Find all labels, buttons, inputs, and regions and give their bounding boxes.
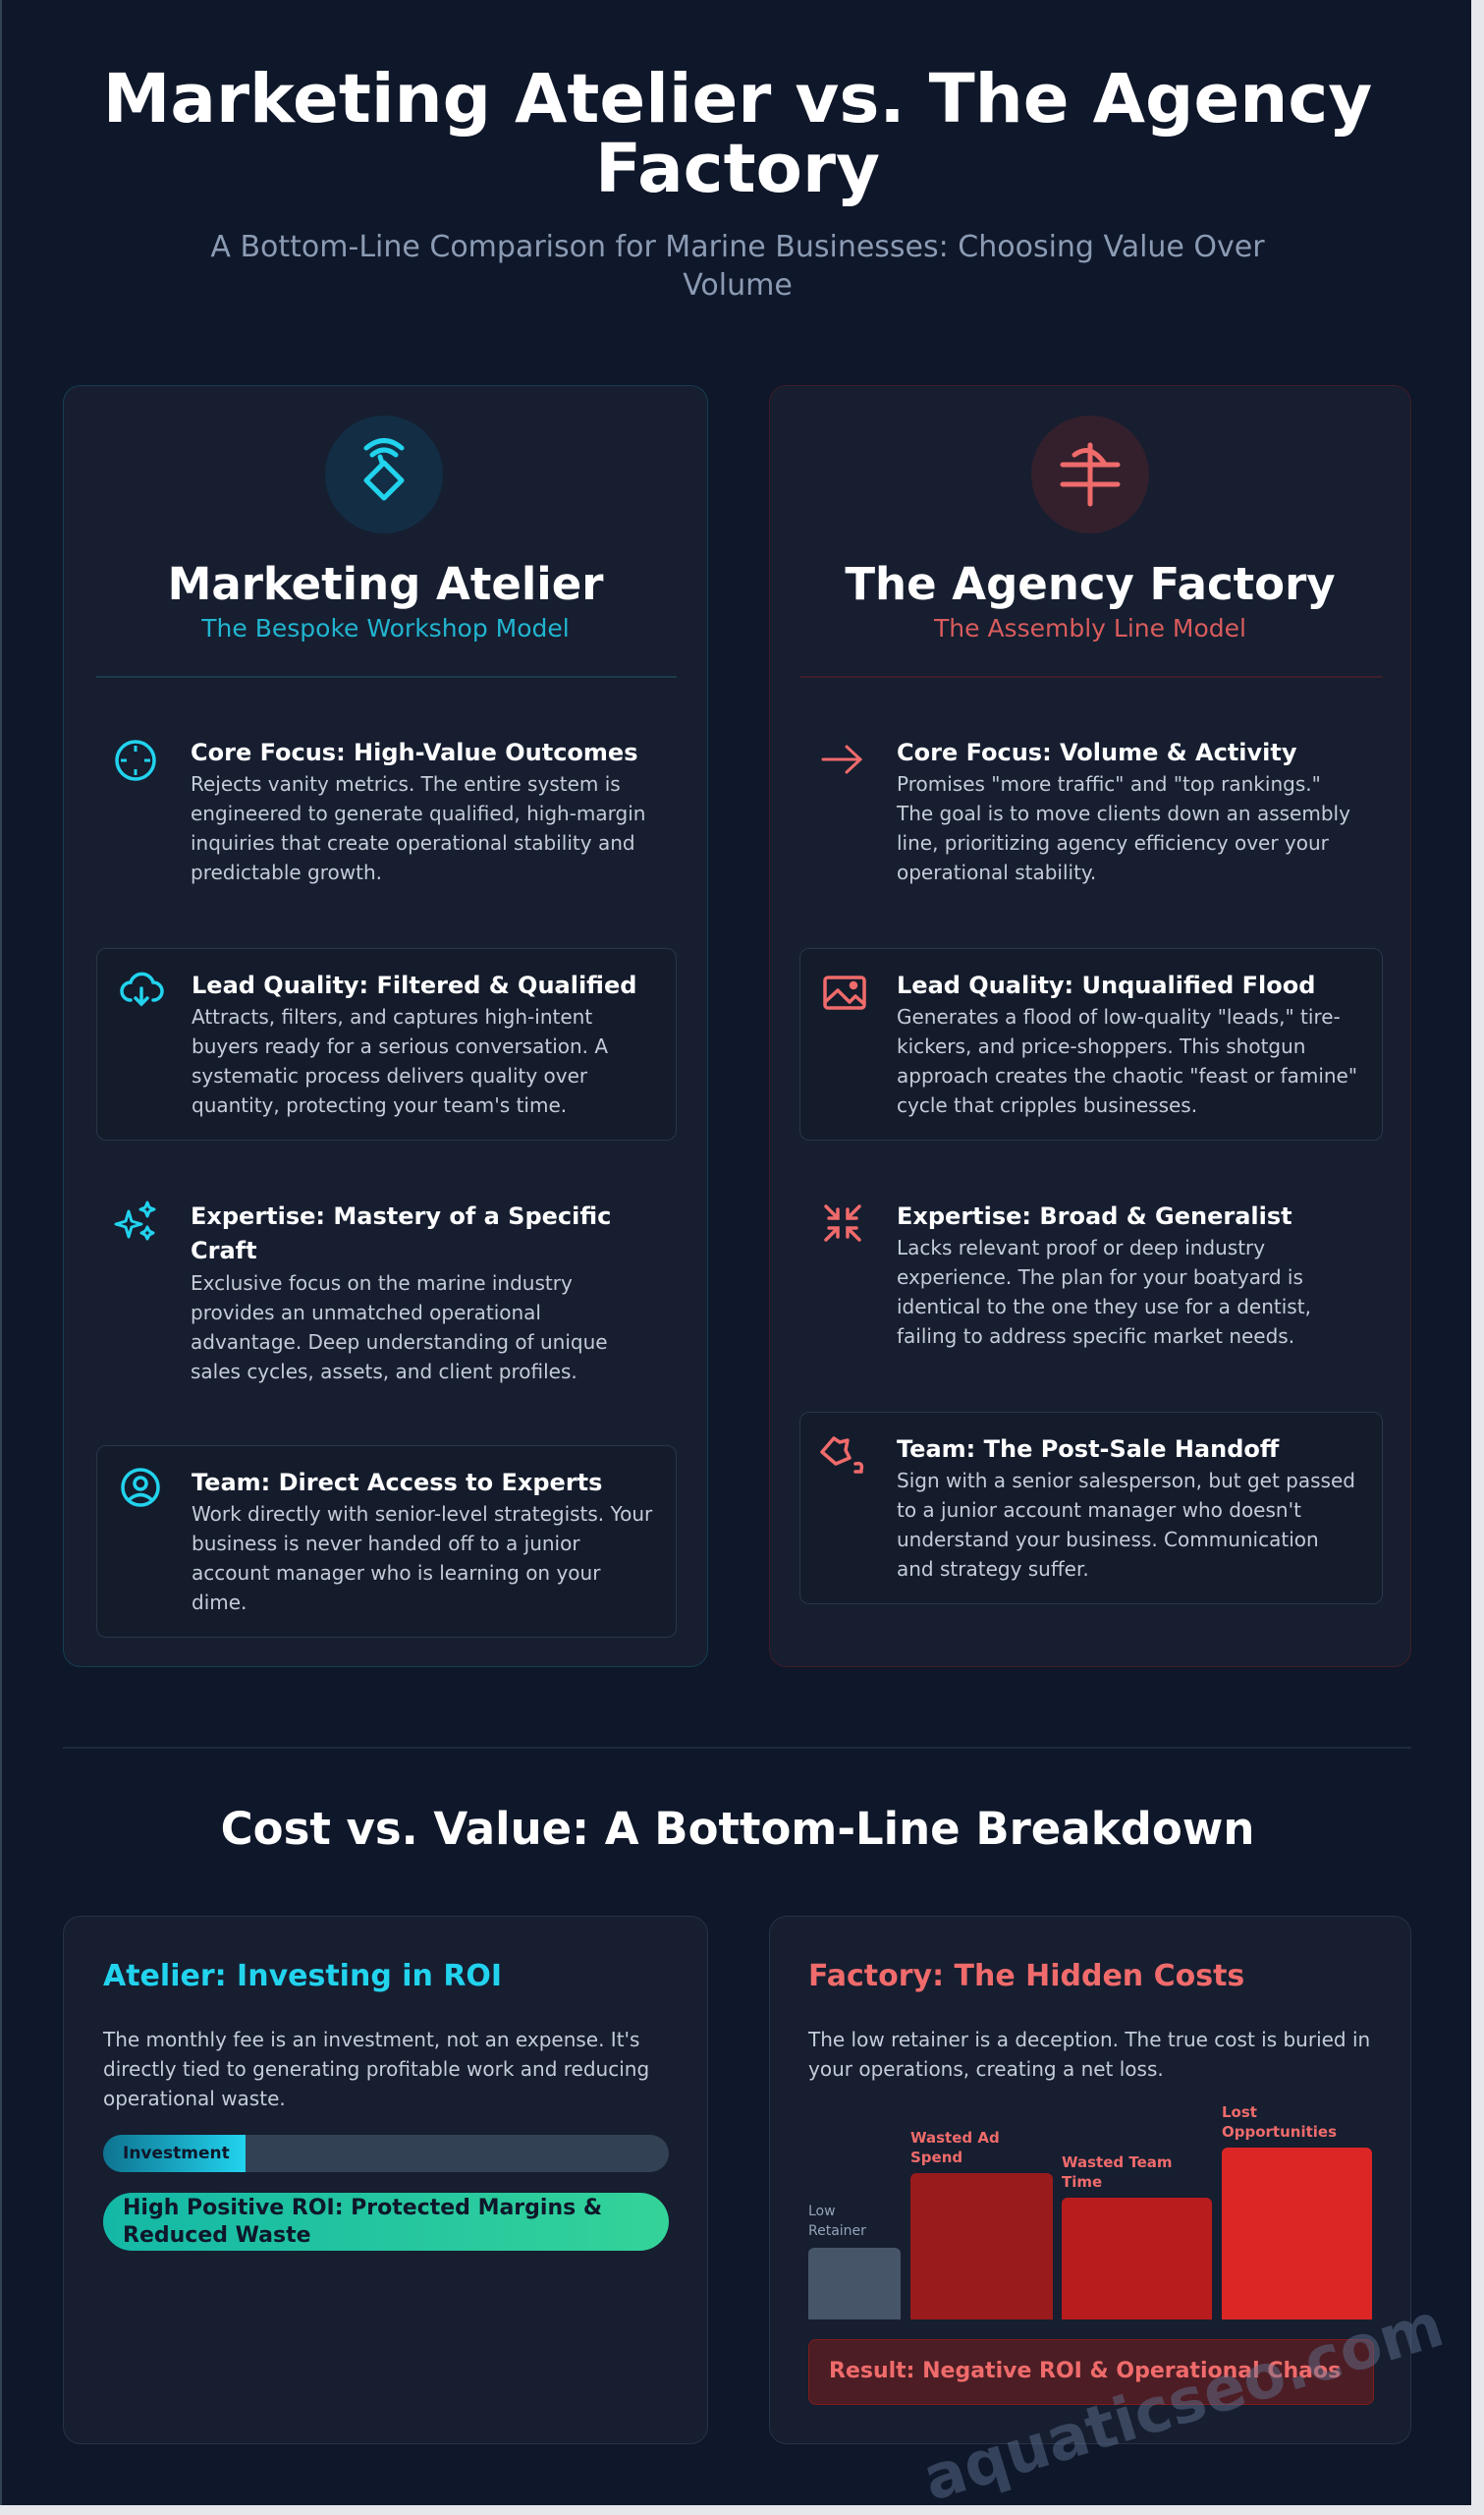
bar: lost opportunities: Opportunities: [1222, 2123, 1337, 2141]
subtitle: Volume: [683, 268, 793, 303]
panel: agency factory: operational stability.: [897, 861, 1096, 884]
item: expertise: [114, 1201, 611, 1383]
icon: arrow right: [821, 745, 862, 774]
item: team: Team: Direct Access to Experts: [192, 1469, 602, 1496]
result callout: Result: Negative ROI & Operational Chaos: [829, 2359, 1341, 2383]
bar: wasted ad spend: Spend: [910, 2149, 962, 2166]
paragraph: The monthly fee is an investment, not an expense. It's: [103, 2028, 639, 2051]
panel: agency factory: Promises "more traffic" and "top rankings.": [897, 772, 1321, 796]
bar: wasted ad spend: Wasted Ad: [910, 2129, 1000, 2147]
bar: wasted team time: Time: [1062, 2173, 1102, 2191]
item: team: Work directly with senior-level strategists. Your: [192, 1502, 652, 1526]
item: lead quality: Generates a flood of low-quality "leads," tire-: [897, 1005, 1341, 1029]
subheading: The Assembly Line Model: [934, 614, 1246, 643]
item: team: business is never handed off to a junior: [192, 1532, 580, 1555]
item: team: Sign with a senior salesperson, but get passed: [897, 1469, 1355, 1492]
paragraph: directly tied to generating profitable work and reducing: [103, 2057, 649, 2081]
panel: agency factory: experience. The plan for your boatyard is: [897, 1265, 1303, 1289]
title: [103, 60, 1372, 208]
bar: low retainer: Retainer: [808, 2223, 866, 2239]
heading: investing in ROI: Atelier: Investing in ROI: [103, 1959, 502, 1993]
icon: cloud download: [120, 973, 164, 1006]
title: Factory: [595, 130, 880, 208]
section heading: Cost vs. Value: A Bottom-Line Breakdown: [221, 1803, 1254, 1855]
panel: agency factory: Lacks relevant proof or deep industry: [897, 1236, 1265, 1259]
bar: lost opportunities: Lost: [1222, 2103, 1257, 2121]
item: core focus: [115, 739, 645, 884]
bar: wasted ad spend: [910, 2129, 1053, 2319]
item: lead quality: cycle that cripples businesses.: [897, 1093, 1197, 1117]
panel: agency factory: Expertise: Broad & Generalist: [897, 1202, 1292, 1230]
panel: marketing atelier: [63, 385, 708, 1667]
item: team: to a junior account manager who doesn't: [897, 1498, 1301, 1522]
item: lead quality: approach creates the chaotic "feast or famine": [897, 1064, 1357, 1088]
paragraph: operational waste.: [103, 2087, 286, 2110]
panel: marketing atelier: Exclusive focus on the marine industry: [191, 1271, 573, 1295]
paragraph: The low retainer is a deception. The true cost is buried in: [808, 2028, 1370, 2051]
subtitle: [210, 230, 1265, 303]
paragraph: [102, 2028, 649, 2110]
icon: sparkles: [114, 1201, 155, 1241]
panel: marketing atelier: Expertise: Mastery of a Specific: [191, 1202, 611, 1230]
icon: atelier badge: [325, 416, 443, 533]
panel: marketing atelier: Craft: [191, 1237, 257, 1264]
icon: handoff tag: [820, 1436, 864, 1474]
item: lead quality: kickers, and price-shoppers. This shotgun: [897, 1034, 1305, 1058]
panel: agency factory: failing to address specific market needs.: [897, 1324, 1294, 1348]
panel: atelier ROI: [63, 1916, 708, 2444]
item: expertise: [824, 1202, 1311, 1348]
panel: agency factory: [769, 385, 1411, 1667]
panel: marketing atelier: Core Focus: High-Value Outcomes: [191, 739, 637, 766]
subtitle: A Bottom-Line Comparison for Marine Businesses: Choosing Value Over: [210, 230, 1265, 264]
heading: marketing atelier: Marketing Atelier: [168, 558, 603, 610]
bar chart: [808, 2103, 1372, 2319]
item: team: [96, 1445, 677, 1638]
ROI result pill: [103, 2193, 669, 2251]
bar: low retainer: Low: [808, 2204, 836, 2219]
title: Marketing Atelier vs. The Agency: [103, 60, 1372, 139]
panel: marketing atelier: sales cycles, assets, and client profiles.: [191, 1360, 577, 1383]
investment bar: [103, 2135, 669, 2172]
panel: marketing atelier: Rejects vanity metrics. The entire system is: [191, 772, 621, 796]
item: lead quality: [96, 948, 677, 1141]
panel: marketing atelier: advantage. Deep understanding of unique: [191, 1330, 608, 1354]
panel: marketing atelier: predictable growth.: [191, 861, 382, 884]
bar: low retainer: [808, 2204, 901, 2319]
item: lead quality: Lead Quality: Filtered & Qualified: [192, 972, 636, 999]
heading: agency factory: The Agency Factory: [845, 558, 1336, 610]
subheading: The Bespoke Workshop Model: [201, 614, 570, 643]
panel: factory hidden costs: [769, 1916, 1411, 2444]
heading: hidden costs: Factory: The Hidden Costs: [808, 1959, 1244, 1993]
item: team: account manager who is learning on your: [192, 1561, 600, 1585]
result callout: [808, 2339, 1374, 2405]
panel: agency factory: identical to the one they use for a dentist,: [897, 1295, 1311, 1318]
panel: marketing atelier: engineered to generate qualified, high-margin: [191, 802, 645, 825]
item: team: [799, 1412, 1383, 1604]
item: lead quality: quantity, protecting your team's time.: [192, 1093, 567, 1117]
icon: user: [121, 1468, 160, 1507]
panel: agency factory: The goal is to move clients down an assembly: [897, 802, 1350, 825]
item: team: dime.: [192, 1591, 247, 1614]
ROI result pill: Reduced Waste: [123, 2223, 311, 2248]
panel: agency factory: line, prioritizing agency efficiency over your: [897, 831, 1329, 855]
item: lead quality: Attracts, filters, and captures high-intent: [192, 1005, 592, 1029]
icon: shrink arrows: [824, 1204, 861, 1242]
item: team: understand your business. Communication: [897, 1528, 1319, 1551]
paragraph: [807, 2028, 1370, 2081]
item: lead quality: Lead Quality: Unqualified Flood: [897, 972, 1315, 999]
icon: factory badge: [1031, 416, 1149, 533]
item: lead quality: [799, 948, 1383, 1141]
panel: agency factory: Core Focus: Volume & Activity: [897, 739, 1297, 766]
investment bar: Investment: [123, 2144, 230, 2163]
icon: image: [823, 976, 866, 1010]
bar: wasted team time: [1062, 2153, 1212, 2319]
panel: marketing atelier: inquiries that create operational stability and: [191, 831, 635, 855]
icon: target: [115, 740, 156, 781]
item: lead quality: buyers ready for a serious conversation. A: [192, 1034, 608, 1058]
panel: marketing atelier: provides an unmatched operational: [191, 1301, 541, 1324]
bar: lost opportunities: [1222, 2103, 1372, 2319]
item: lead quality: systematic process delivers quality over: [192, 1064, 587, 1088]
item: core focus: [821, 739, 1350, 884]
item: team: and strategy suffer.: [897, 1557, 1089, 1581]
ROI result pill: High Positive ROI: Protected Margins &: [123, 2196, 602, 2220]
item: team: Team: The Post-Sale Handoff: [897, 1435, 1279, 1463]
paragraph: your operations, creating a net loss.: [808, 2057, 1164, 2081]
bar: wasted team time: Wasted Team: [1062, 2153, 1173, 2171]
